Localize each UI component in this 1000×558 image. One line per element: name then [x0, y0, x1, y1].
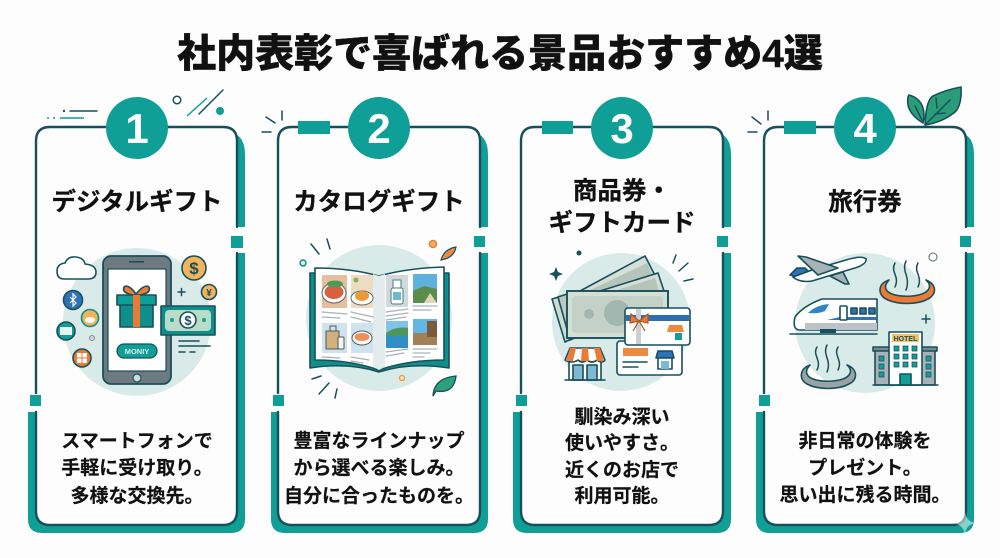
number badge 4: 4 — [853, 105, 877, 152]
icon: corner sparkle watermark — [954, 512, 975, 534]
icon: gift app — [73, 349, 91, 367]
icon: phone — [103, 256, 171, 384]
icon: cloud — [57, 257, 96, 279]
photo: pasta plate — [351, 275, 373, 308]
photo: shopping bag — [322, 323, 347, 353]
text: card 4 description: 思い出に残る時間。 — [779, 483, 951, 506]
illustration: phone with gift and money — [57, 248, 216, 396]
icon: banknote — [161, 306, 215, 335]
text: card 3 description: 近くのお店で — [565, 459, 679, 481]
text: card 1 description: スマートフォンで — [61, 431, 213, 452]
text: card 1 description: 多様な交換先。 — [70, 484, 204, 507]
icon: sparkle — [549, 267, 563, 281]
card frame 4 — [748, 111, 974, 533]
gift card with bow — [625, 308, 690, 345]
text: card 1 description — [61, 431, 213, 507]
number badge 2 — [348, 97, 410, 159]
number badge 4 — [834, 97, 896, 159]
icon: hotel building: HOTEL — [894, 336, 918, 343]
photo: bottle — [386, 275, 408, 307]
photo: sea — [386, 321, 408, 348]
text: card 3 description: 利用可能。 — [574, 485, 670, 507]
number badge 3 — [591, 97, 653, 159]
card frame 1 — [28, 90, 245, 533]
illustration: plane, train, onsen, hotel — [790, 253, 938, 393]
heading: digital gift: デジタルギフト — [51, 187, 223, 216]
heading: vouchers and gift cards: ギフトカード — [548, 209, 696, 237]
icon: grey onsen — [801, 345, 856, 388]
icon: hotel building — [873, 332, 938, 385]
text: card 4 description — [779, 430, 951, 506]
title: 社内表彰で喜ばれる景品おすすめ4選 — [177, 33, 823, 76]
icon: storefront — [565, 348, 605, 380]
text: card 4 description: プレゼント。 — [808, 456, 922, 479]
icon: yen coin — [202, 284, 216, 300]
icon: bluetooth — [64, 290, 82, 310]
photo: beach — [413, 319, 437, 345]
icon: leaves on card top — [908, 87, 961, 125]
photo: sushi dish — [351, 323, 373, 353]
heading: travel vouchers: 旅行券 — [828, 188, 902, 216]
number badge 1: 1 — [125, 105, 149, 152]
card frame 2 — [262, 111, 488, 533]
text: card 3 description: 使いやすさ。 — [565, 432, 679, 454]
heading: vouchers and gift cards — [548, 177, 696, 237]
icon: mail — [57, 322, 75, 340]
text: card 3 description: 馴染み深い — [574, 406, 670, 428]
text: card 2 description: から選べる楽しみ。 — [293, 457, 465, 479]
text: card 4 description: 非日常の体験を — [798, 430, 932, 452]
icon: green leaf — [433, 376, 456, 396]
photo: salad plate — [322, 275, 347, 308]
panel: card 4 travel vouchers — [748, 87, 975, 534]
number badge 2: 2 — [367, 105, 391, 152]
text: card 3 description — [565, 406, 679, 507]
lower card with store — [617, 341, 682, 375]
banknotes — [552, 256, 668, 342]
number badge 3: 3 — [610, 105, 634, 152]
photo: landscape — [413, 274, 437, 303]
icon: banknote: $ — [184, 313, 192, 328]
icon: dollar coin: $ — [189, 259, 199, 278]
illustration: open catalog book — [300, 239, 456, 398]
number badge 1 — [106, 97, 168, 159]
icon: yen coin: ¥ — [206, 288, 212, 299]
illustration: banknotes, gift cards, shop — [549, 250, 693, 391]
panel: card 1 digital gift — [28, 90, 245, 533]
book — [310, 267, 449, 372]
heading: catalog gift: カタログギフト — [293, 187, 465, 216]
icon: airplane — [790, 256, 866, 284]
icon: bullet train — [790, 299, 877, 334]
text: card 2 description — [284, 430, 474, 507]
heading: vouchers and gift cards: 商品券・ — [573, 177, 671, 205]
icon: phone: MONIY — [125, 347, 149, 356]
panel: card 3 vouchers and gift cards — [513, 97, 731, 533]
panel: card 2 catalog gift — [262, 97, 488, 533]
icon: dollar coin — [182, 256, 206, 280]
icon: orange onsen — [880, 253, 937, 304]
card frame 3 — [513, 121, 731, 533]
icon: cloud app — [82, 310, 98, 326]
text: card 2 description: 豊富なラインナップ — [293, 430, 465, 452]
text: card 2 description: 自分に合ったものを。 — [284, 485, 474, 507]
text: card 1 description: 手軽に受け取り。 — [61, 456, 213, 479]
icon: orange leaf — [441, 247, 456, 260]
